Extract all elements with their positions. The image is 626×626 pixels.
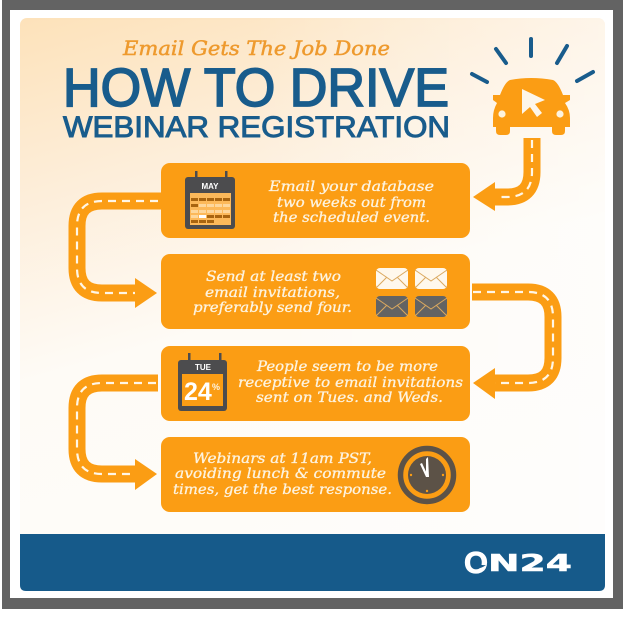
text: step 4 <box>173 451 392 498</box>
text: step 2 <box>193 269 352 316</box>
arrow: step 2 to step 3 <box>472 292 553 399</box>
icon: May calendar: MAY <box>201 182 219 191</box>
text: step 3 <box>238 359 463 406</box>
icon: rays above car <box>472 39 593 82</box>
panel: step 2 <box>161 254 470 329</box>
text: step 2: email invitations, <box>205 285 340 301</box>
text: step 3: sent on Tues. and Weds. <box>256 390 443 406</box>
icon: Tuesday 24% calendar <box>178 353 227 411</box>
icon: four envelopes <box>376 268 447 317</box>
arrow: car to step 1 <box>473 138 532 211</box>
subtitle: Email Gets The Job Done <box>122 36 390 60</box>
text: step 3: People seem to be more <box>256 359 438 375</box>
text: step 2: Send at least two <box>206 269 341 285</box>
text: step 3: receptive to email invitations <box>238 375 463 391</box>
arrow: step 1 to step 2 <box>77 201 161 308</box>
icon: May calendar <box>185 171 235 229</box>
logo: ON24 <box>464 545 572 580</box>
text: step 2: preferably send four. <box>193 300 352 316</box>
text: step 4: times, get the best response. <box>173 482 392 498</box>
text: step 4: avoiding lunch & commute <box>175 466 386 482</box>
icon: clock <box>400 448 454 502</box>
footer band <box>20 534 605 591</box>
text: step 1: Email your database <box>268 179 434 195</box>
logo: ON24: N24 <box>488 551 572 577</box>
panel: step 3 <box>161 346 470 421</box>
text: step 4: Webinars at 11am PST, <box>193 451 372 467</box>
panel: step 4 <box>161 437 470 512</box>
logo: ON24: O <box>464 545 488 580</box>
title: WEBINAR REGISTRATION <box>63 111 450 144</box>
text: step 1 <box>268 179 434 226</box>
arrow: step 3 to step 4 <box>77 383 158 490</box>
title: HOW TO DRIVE <box>63 58 449 118</box>
icon: Tuesday 24% calendar: 24 <box>184 378 212 406</box>
text: step 1: the scheduled event. <box>273 210 430 226</box>
icon: car with cursor <box>493 78 570 135</box>
panel: step 1 <box>161 163 470 238</box>
icon: Tuesday 24% calendar: % <box>212 382 220 392</box>
text: step 1: two weeks out from <box>277 195 426 211</box>
icon: Tuesday 24% calendar: TUE <box>195 363 212 372</box>
title <box>63 58 450 144</box>
